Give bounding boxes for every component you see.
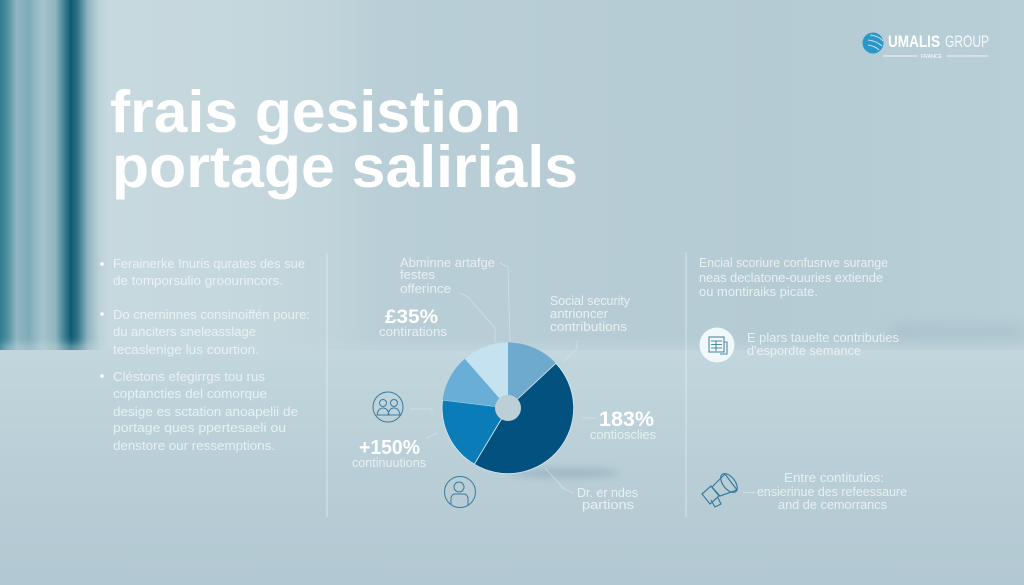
bullet 1: de tomporsulio groourincors. (113, 274, 283, 288)
label: social security (550, 294, 631, 334)
logo: Umalis Group: GROUP (945, 33, 989, 51)
bullet 2: Do cnerninnes consinoiffén poure: (113, 308, 310, 322)
icon: logo globe (862, 32, 884, 54)
stat: +150%: +150% (359, 436, 420, 459)
label: bottom (577, 486, 638, 512)
logo: Umalis Group (862, 32, 989, 60)
callout text: bottom: and de cemorrancs (778, 498, 887, 512)
bullet 1 (100, 257, 305, 288)
segment: largest dark (474, 363, 574, 474)
stat: +150% (352, 436, 426, 470)
bullet 3: desige es sctation anoapelii de (113, 405, 298, 419)
callout text: document: d'espordte semance (747, 344, 861, 358)
callout text: bottom: ensierinue des refeessaure (757, 485, 907, 499)
title (110, 79, 578, 200)
pie chart (442, 342, 574, 474)
right intro text: ou montiraiks picate. (699, 285, 818, 299)
label: top: festes (400, 268, 435, 282)
panel: right column (699, 256, 907, 512)
label: social security: antrioncer (550, 307, 608, 321)
icon: megaphone (702, 471, 741, 507)
bullet 2: tecaslenige lus courtion. (113, 343, 259, 357)
title: portage salirials (112, 134, 578, 200)
callout text: bottom: Entre contitutios: (784, 471, 884, 485)
icon: two people (373, 392, 403, 422)
right intro text: Encial scoriure confusnve surange (699, 256, 888, 270)
bullet 2: du anciters sneleasslage (113, 325, 256, 339)
dash (743, 492, 755, 493)
bullet 3: Cléstons efegirrgs tou rus (113, 370, 265, 384)
leader lines (410, 263, 597, 493)
icon: document badge (700, 328, 734, 362)
icon: person (444, 476, 476, 508)
segment: upper right (508, 342, 556, 408)
label: top (400, 256, 495, 296)
pie centre hole (495, 395, 521, 421)
stat: 35% (379, 306, 447, 339)
logo tagline: FRANCE (921, 54, 942, 60)
label: social security: Social security (550, 294, 631, 308)
right divider (686, 252, 687, 517)
stat: 35%: contirations (379, 325, 447, 339)
title: frais gesistion (110, 79, 521, 145)
bullet 1: Ferainerke Inuris qurates des sue (113, 257, 305, 271)
callout text: document: E plars tauelte contributies (747, 331, 899, 345)
segment: pale (465, 342, 508, 408)
label: top: offerince (400, 282, 451, 296)
bullet 3 (100, 370, 298, 453)
bullet 2 (100, 308, 310, 357)
right intro text: neas declatone-ouuries extiende (699, 271, 883, 285)
label: top: Abminne artafge (400, 256, 495, 270)
callout text: bottom (757, 471, 907, 512)
pie labels (352, 256, 656, 512)
stat: +150%: continuutions (352, 456, 426, 470)
label: bottom: partions (582, 498, 634, 512)
stat: 183% (590, 408, 656, 442)
callout text: document (747, 331, 899, 358)
right intro text (699, 256, 888, 299)
bullet 3: denstore our ressemptions. (113, 439, 275, 453)
left divider (326, 253, 328, 517)
label: bottom: Dr. er ndes (577, 486, 638, 500)
panel: left bullet list (100, 257, 310, 453)
segment: lower left (442, 400, 508, 464)
stat: 183%: contiosclies (590, 428, 656, 442)
segment: mid blue (443, 359, 508, 408)
label: social security: contributions (550, 320, 627, 334)
bullet 3: coptancties del comorque (113, 387, 267, 401)
logo wordmark: UMALIS (888, 33, 940, 51)
stat: 183%: 183% (599, 408, 654, 431)
bullet 3: portage ques ppertesaeli ou (113, 421, 286, 435)
stat: 35%: £35% (385, 306, 438, 328)
